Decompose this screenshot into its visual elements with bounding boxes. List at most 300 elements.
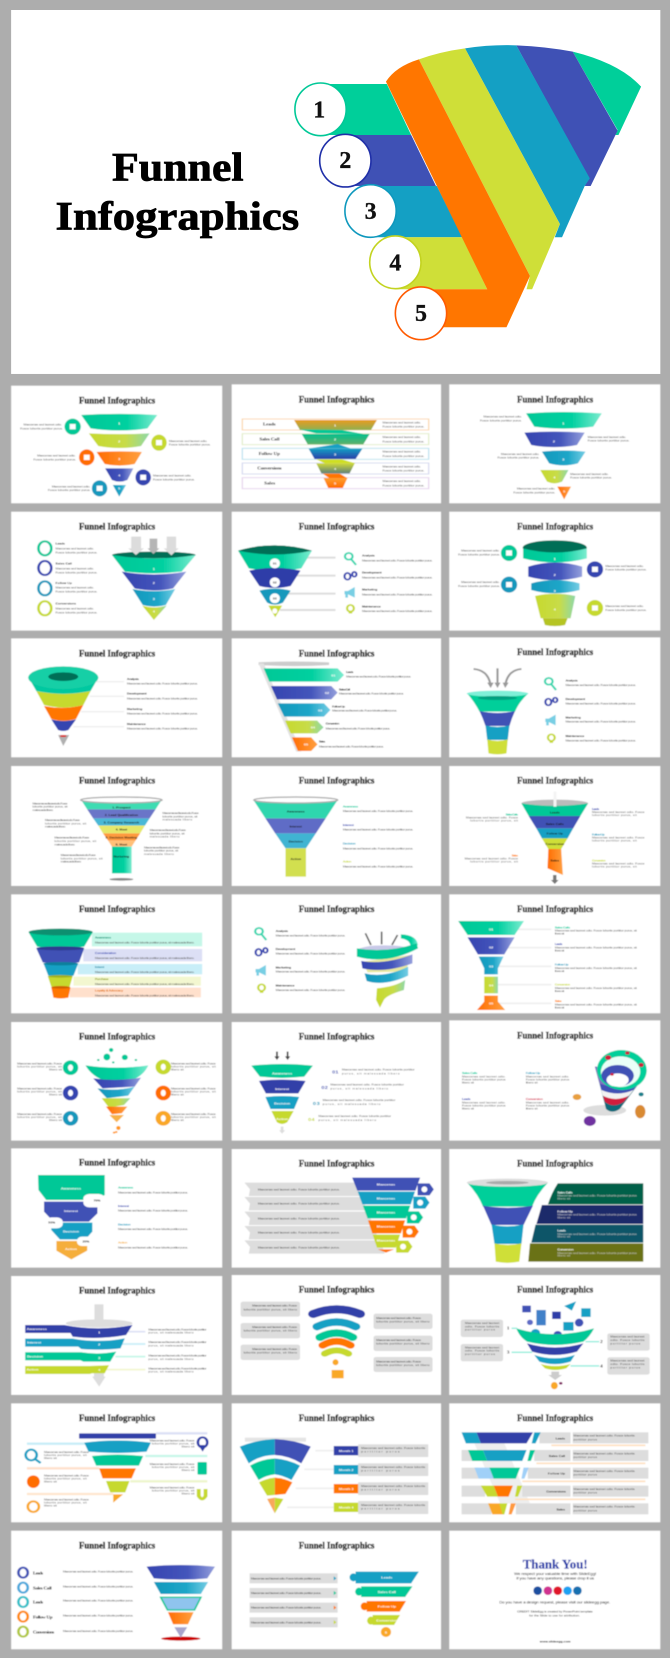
descriptions: Maecenas sed laoreet odio. Fusce — [150, 1486, 195, 1490]
row labels: Maecenas sed laoreet odio. Fusce lobortis — [574, 1434, 635, 1438]
gray boxes: Maecenas sed laoreet odio. Fusce — [252, 1347, 297, 1351]
boxes: 2 — [600, 1340, 603, 1344]
descriptions: lobortis porttitor purus, sit — [45, 822, 86, 825]
descriptions: lobortis porttitor purus, sit — [17, 1090, 62, 1094]
ribbons: Maecenas sed laoreet odio. Fusce lobortis porttitor purus. — [258, 1188, 340, 1191]
descriptions: lobortis porttitor purus, sit — [17, 1115, 62, 1119]
descriptions: Maecenas sed laoreet odio. — [153, 474, 192, 478]
hero title: Funnel — [112, 145, 244, 189]
gray boxes: lobortis porttitor purus, sit libero — [376, 1363, 430, 1367]
connectors — [280, 558, 336, 610]
descriptions: Maecenas sed laoreet odio. Fusce — [54, 836, 90, 840]
tags: 05 — [304, 743, 308, 747]
list: purus, sit malesuada libero — [323, 1102, 381, 1106]
funnel: 4 — [553, 476, 555, 480]
list: Follow Up — [33, 1615, 53, 1619]
list: Maecenas sed laoreet odio. Fusce lobortis porttitor purus, sit — [555, 966, 637, 970]
title: Funnel Infographics — [517, 648, 593, 658]
list: Maecenas sed laoreet odio. Fusce lobortis porttitor purus. — [332, 709, 397, 713]
descriptions: lobortis porttitor purus, sit — [470, 819, 518, 823]
list: Maecenas sed laoreet odio. Fusce lobortis porttitor purus. — [127, 697, 198, 700]
tags: 01 — [331, 674, 336, 677]
row labels: Maecenas sed laoreet odio. — [383, 435, 421, 439]
title: Funnel Infographics — [299, 777, 374, 786]
descriptions: malesuada libero — [32, 808, 53, 812]
descriptions: Maecenas sed laoreet odio. Fusce — [44, 1450, 89, 1454]
list: Maecenas sed laoreet odio. Fusce lobortis porttitor purus. — [362, 576, 433, 579]
list: Maecenas sed laoreet odio. Fusce lobortis porttitor purus. — [565, 720, 636, 724]
descriptions: Maecenas sed laoreet odio. Fusce — [17, 1087, 62, 1091]
row labels: Sales Call — [549, 1454, 565, 1458]
descriptions: Sales Calls — [506, 813, 518, 816]
funnel — [81, 797, 162, 881]
descriptions: lobortis porttitor purus, sit — [592, 865, 637, 869]
descriptions — [465, 807, 645, 869]
descriptions — [44, 1439, 195, 1507]
funnel: Decision — [63, 1230, 79, 1233]
funnel: Decision — [289, 840, 303, 843]
descriptions: Fusce lobortis porttitor purus. — [458, 553, 500, 556]
title: Funnel Infographics — [517, 777, 593, 786]
funnel: 4 — [554, 608, 556, 612]
descriptions: Maecenas sed laoreet odio. — [501, 452, 540, 456]
panel 6: ring funnel — [449, 512, 660, 631]
descriptions: Maecenas sed laoreet odio. Fusce — [17, 1062, 62, 1065]
hero number circles: 2 — [339, 146, 351, 173]
funnel: Action — [290, 857, 301, 861]
descriptions: malesuada libero — [162, 818, 193, 822]
funnel: 3 — [118, 457, 120, 461]
descriptions: Follow Up — [526, 1071, 540, 1075]
panel 21: funnel with dark panels — [449, 1149, 660, 1268]
descriptions: Maecenas sed laoreet odio. — [461, 549, 500, 552]
descriptions: Maecenas sed laoreet odio. Fusce — [150, 828, 186, 832]
spiral — [357, 932, 418, 1008]
descriptions: lobortis porttitor purus, sit — [17, 1065, 62, 1068]
boxes: Maecenas sed laoreet — [465, 1346, 499, 1349]
title: Funnel Infographics — [517, 523, 593, 532]
descriptions: Maecenas sed laoreet odio. Fusce — [32, 802, 68, 805]
row text: Loyalty & Advocacy — [95, 989, 123, 992]
descriptions: lobortis porttitor purus, sit — [171, 1065, 216, 1068]
panel 29: tabbed funnel — [232, 1531, 441, 1649]
title: Funnel Infographics — [79, 397, 155, 406]
funnel: 03 — [489, 965, 493, 968]
descriptions: Maecenas sed laoreet odio. Fusce — [171, 1087, 216, 1091]
list: Sales Calls — [555, 926, 570, 929]
descriptions: Maecenas sed laoreet odio. Fusce — [466, 816, 518, 820]
descriptions: libero sit — [44, 1456, 57, 1460]
funnel — [352, 1178, 420, 1253]
list: Sales Call — [339, 688, 350, 691]
hero panel: Funnel Infographics — [11, 10, 660, 374]
icons — [255, 928, 268, 992]
descriptions: lobortis porttitor purus, sit — [162, 815, 198, 818]
gray boxes: lobortis porttitor purus, sit libero — [244, 1308, 297, 1311]
list — [565, 679, 636, 742]
panel 5: funnel with connectors and icons — [232, 512, 441, 631]
list: Leads — [555, 942, 563, 946]
funnel — [523, 540, 587, 626]
funnel: 5 — [118, 487, 120, 491]
funnel: 6. Meet — [116, 843, 127, 846]
funnel: Maecenas — [377, 1197, 395, 1200]
gray boxes: Maecenas sed laoreet odio. Fusce — [376, 1360, 421, 1363]
title: Funnel Infographics — [79, 905, 155, 915]
descriptions: Maecenas sed laoreet odio. Fusce — [44, 1498, 89, 1501]
arrows — [128, 537, 179, 555]
descriptions: lobortis porttitor purus, sit — [470, 860, 518, 863]
list: libero sit — [555, 949, 564, 952]
funnel: 01 — [489, 928, 493, 932]
row labels: Sales Call — [259, 437, 280, 441]
cone — [28, 666, 98, 746]
list — [118, 1186, 188, 1249]
boxes: porttitor purus — [610, 1342, 641, 1345]
list: Marketing — [362, 588, 378, 592]
boxes: 1 — [507, 1326, 510, 1330]
title: Funnel Infographics — [79, 649, 155, 659]
gray arrow — [66, 1304, 132, 1387]
descriptions: purus, sit malesuada libero — [148, 1331, 194, 1335]
descriptions: Follow Up — [592, 833, 605, 836]
descriptions: Sales Calls — [462, 1071, 478, 1075]
funnel: 2 — [118, 440, 120, 444]
descriptions: lobortis porttitor purus, sit — [152, 1489, 195, 1493]
funnel — [38, 1175, 105, 1259]
funnel — [85, 1048, 148, 1134]
descriptions: Maecenas sed laoreet odio. — [24, 423, 62, 426]
footer text: CREDIT: SlideEgg is created by PowerPoint template — [517, 1610, 593, 1613]
hero number circles — [295, 83, 447, 340]
list: Awareness — [343, 805, 358, 809]
list: Conversion — [326, 722, 339, 726]
tags: 02 — [325, 691, 329, 695]
funnel: 2 — [334, 438, 336, 442]
descriptions: Maecenas sed laoreet odio. — [37, 454, 76, 457]
list: Maecenas sed laoreet odio. Fusce lobortis porttitor purus. — [276, 952, 345, 955]
funnel: Sales Calls — [546, 822, 564, 826]
list: Maecenas sed laoreet odio. Fusce lobortis porttitor purus. — [319, 745, 384, 748]
connectors — [287, 1451, 334, 1507]
funnel: Action — [27, 1368, 38, 1372]
funnel: 1 — [334, 424, 336, 427]
title: Funnel Infographics — [299, 395, 374, 405]
title: Funnel Infographics — [79, 777, 155, 786]
list: Maecenas sed laoreet odio. Fusce lobortis porttitor purus. — [346, 675, 411, 678]
descriptions: Maecenas sed laoreet odio. — [462, 1075, 506, 1079]
list: 02 — [321, 1086, 328, 1091]
funnel: 1 — [153, 567, 155, 571]
list: Maecenas sed laoreet odio. Fusce lobortis porttitor purus. — [118, 1227, 188, 1231]
list: Maecenas sed laoreet odio. Fusce lobortis porttitor purus. — [118, 1191, 188, 1194]
gray boxes: lobortis porttitor purus, sit libero — [376, 1320, 430, 1324]
list: Maecenas sed laoreet odio. Fusce lobortis porttitor purus. — [343, 828, 413, 831]
funnel — [147, 1565, 215, 1641]
title: Funnel Infographics — [299, 905, 374, 915]
row labels: Leads — [263, 422, 276, 427]
list: Maecenas sed laoreet odio. — [56, 567, 94, 570]
descriptions: lobortis porttitor purus, sit — [152, 1442, 195, 1445]
descriptions: lobortis porttitor purus, sit — [152, 1465, 195, 1469]
list: Decision — [118, 1223, 131, 1226]
list: Interest — [343, 823, 354, 827]
panel 2: twisted funnel with rows — [232, 384, 441, 503]
title: Funnel Infographics — [79, 1287, 155, 1296]
descriptions — [458, 549, 647, 612]
funnel: Conversion — [545, 842, 564, 846]
row labels: porttitor purus — [574, 1455, 598, 1459]
descriptions: lobortis porttitor purus, sit — [150, 832, 185, 835]
dark panels: Maecenas sed laoreet odio. Fusce lobortis porttitor purus — [557, 1213, 637, 1217]
hex icons — [396, 1183, 434, 1253]
tags: 03 — [318, 709, 322, 712]
funnel — [238, 545, 312, 617]
funnel segments — [462, 1432, 541, 1514]
funnel: Interest — [27, 1341, 42, 1345]
hero title: Infographics — [56, 194, 299, 238]
list: Analysis — [127, 677, 139, 681]
hero funnel chart — [321, 45, 641, 327]
title: Funnel Infographics — [79, 1414, 155, 1424]
list: Sales Call — [56, 562, 72, 566]
list: Maecenas sed laoreet odio. Fusce lobortis porttitor purus. — [276, 970, 345, 974]
connectors — [498, 929, 551, 1003]
boxes: odio. Fusce lobortis — [610, 1338, 645, 1342]
list — [18, 1568, 134, 1637]
message: If you have any questions, please drop it us — [516, 1577, 594, 1581]
descriptions: Maecenas sed laoreet odio. Fusce — [61, 853, 96, 857]
row labels: Maecenas sed laoreet odio. Fusce lobortis — [574, 1452, 635, 1455]
boxes: 4 — [600, 1364, 603, 1368]
panel 13: stacked funnel with tinted rows — [11, 894, 222, 1013]
tags — [259, 661, 344, 752]
funnel: 4 — [334, 467, 336, 471]
list — [319, 670, 411, 748]
dark panels: Sales Calls — [557, 1191, 573, 1194]
funnel: Interest — [290, 825, 302, 828]
descriptions: libero sit — [526, 1107, 538, 1110]
list: Follow Up — [555, 963, 569, 967]
funnel: 3 — [554, 589, 556, 593]
connectors — [74, 682, 124, 727]
title: Funnel Infographics — [299, 1286, 374, 1295]
dark panels: libero sit — [557, 1235, 570, 1239]
boxes: porttitor purus — [465, 1352, 495, 1356]
ribbons: Maecenas sed laoreet odio. Fusce lobortis porttitor purus. — [258, 1231, 340, 1235]
list: libero sit — [555, 969, 564, 973]
funnel: Decision — [27, 1355, 43, 1358]
thumbnail grid — [11, 384, 660, 1649]
list: Marketing — [127, 707, 142, 711]
descriptions: malesuada libero — [54, 843, 75, 846]
gray boxes: lobortis porttitor purus, sit libero — [244, 1329, 297, 1333]
row labels: Fusce lobortis porttitor purus. — [383, 469, 425, 473]
descriptions: Conversion — [592, 859, 606, 862]
title: Funnel Infographics — [299, 523, 374, 532]
list: Development — [565, 697, 585, 701]
row labels: Conversions — [257, 466, 282, 471]
descriptions: Maecenas sed laoreet odio. Fusce lobortis porttitor — [148, 1354, 206, 1358]
list: Maecenas sed laoreet odio. Fusce lobortis porttitor purus. — [63, 1585, 134, 1588]
list: Maecenas sed laoreet odio. Fusce lobortis porttitor — [323, 1098, 395, 1102]
descriptions: Fusce lobortis porttitor purus. — [588, 439, 630, 443]
descriptions: lobortis porttitor purus, sit — [32, 805, 68, 809]
list: Maecenas sed laoreet odio. Fusce lobortis porttitor purus. — [362, 559, 433, 562]
funnel — [350, 1572, 419, 1637]
month rows: Month 1 — [339, 1449, 354, 1453]
descriptions: Fusce lobortis porttitor purus. — [169, 443, 211, 447]
list: Maintenance — [565, 734, 585, 738]
descriptions: Leads — [592, 807, 600, 811]
descriptions: Maecenas sed laoreet odio. — [483, 415, 522, 419]
list: Maintenance — [127, 722, 146, 726]
funnel: 2 — [554, 573, 556, 577]
list: Awareness — [118, 1186, 134, 1190]
panel 27: segmented funnel rows — [449, 1403, 660, 1522]
funnel — [25, 1325, 132, 1374]
funnel: 05 — [489, 1002, 493, 1005]
boxes: Maecenas sed laoreet — [465, 1321, 499, 1325]
descriptions: Maecenas sed laoreet odio. — [461, 580, 500, 584]
descriptions: libero sit — [49, 1093, 62, 1097]
list: Sales Call — [33, 1586, 53, 1590]
row labels: porttitor purus — [574, 1491, 598, 1495]
list: 04 — [308, 1117, 315, 1123]
list: Maecenas sed laoreet odio. — [56, 547, 94, 550]
row labels: Fusce lobortis porttitor purus. — [383, 454, 425, 458]
funnel — [81, 414, 157, 497]
gray rows: Maecenas sed laoreet odio. Fusce lobortis porttitor purus. — [251, 1591, 322, 1595]
funnel: 5. Decision Meeting — [106, 836, 137, 839]
funnel — [467, 1179, 548, 1263]
list: Maecenas sed laoreet odio. Fusce lobortis porttitor purus. — [565, 683, 636, 687]
list — [555, 926, 637, 1009]
funnel — [521, 792, 588, 884]
descriptions: Maecenas sed laoreet odio. Fusce lobortis porttitor — [148, 1328, 206, 1331]
descriptions: Maecenas sed laoreet odio. — [169, 439, 207, 443]
descriptions: lobortis porttitor purus, sit — [592, 839, 637, 842]
title: Funnel Infographics — [517, 395, 593, 405]
row labels: Maecenas sed laoreet odio. — [383, 465, 421, 468]
descriptions: libero sit — [44, 1504, 57, 1507]
descriptions: Maecenas sed laoreet odio. Fusce lobortis porttitor — [148, 1340, 206, 1344]
list: Maecenas sed laoreet odio. Fusce lobortis porttitor purus. — [276, 988, 345, 992]
boxes — [461, 1320, 650, 1375]
list: Follow Up — [332, 705, 345, 708]
list — [362, 554, 433, 613]
funnel: Awareness — [272, 1072, 292, 1075]
list: Maecenas sed laoreet odio. Fusce lobortis porttitor — [342, 1068, 415, 1071]
list: Maecenas sed laoreet odio. Fusce lobortis porttitor purus. — [118, 1246, 188, 1249]
panel 9: kitchen funnel with curved arrows — [449, 637, 660, 757]
month rows: porttitor purus — [361, 1488, 400, 1492]
row text: Maecenas sed laoreet odio. Fusce lobortis porttitor purus, sit malesuada libero. — [95, 994, 195, 998]
funnel: Awareness — [27, 1327, 47, 1331]
gray rows: Maecenas sed laoreet odio. Fusce lobortis porttitor purus. — [251, 1577, 322, 1580]
funnel: 2 — [98, 1343, 100, 1347]
row labels: Maecenas sed laoreet odio. — [383, 421, 421, 424]
funnel — [251, 1064, 313, 1124]
row text: Consideration — [95, 951, 116, 955]
list: Maecenas sed laoreet odio. Fusce lobortis porttitor purus, sit — [555, 929, 637, 933]
month rows: Maecenas sed laoreet odio. Fusce lobortis — [361, 1503, 426, 1507]
panel 18: isometric funnel illustration — [449, 1020, 660, 1141]
row text: Intent — [95, 965, 104, 969]
row labels: Sales — [264, 481, 275, 485]
list: Marketing — [565, 716, 581, 719]
funnel: 50% — [48, 1221, 55, 1225]
descriptions: Fusce lobortis porttitor purus — [526, 1078, 570, 1081]
panel 12: funnel with orange stem — [449, 766, 660, 886]
row text — [95, 936, 195, 998]
fan funnel — [240, 1438, 311, 1513]
row labels: Follow Up — [259, 452, 280, 456]
descriptions: Fusce lobortis porttitor purus. — [20, 427, 63, 430]
month rows: porttitor purus — [361, 1450, 400, 1454]
funnel — [516, 1328, 594, 1389]
title: Funnel Infographics — [299, 1159, 374, 1169]
descriptions: malesuada libero — [144, 852, 174, 856]
row labels: Fusce lobortis porttitor purus. — [383, 484, 425, 487]
panel 28: glossy funnel with list — [11, 1531, 222, 1649]
list: Maecenas sed laoreet odio. Fusce lobortis porttitor purus. — [63, 1614, 134, 1618]
list: Maecenas sed laoreet odio. Fusce lobortis porttitor purus. — [63, 1570, 134, 1574]
list: Maecenas sed laoreet odio. Fusce lobortis porttitor purus. — [343, 809, 413, 813]
descriptions: Fusce lobortis porttitor purus — [462, 1078, 506, 1081]
panel 10: sales pipeline funnel — [11, 766, 222, 886]
descriptions: lobortis porttitor purus, sit — [171, 1090, 216, 1094]
footer text: Do you have a design request, please visit our slideegg page. — [499, 1601, 610, 1605]
title: Funnel Infographics — [299, 1414, 374, 1424]
descriptions: Maecenas sed laoreet odio. Fusce — [162, 811, 199, 815]
panel 23: arc funnel — [232, 1275, 441, 1395]
descriptions: lobortis porttitor purus, sit — [171, 1115, 216, 1119]
gray rows — [462, 1432, 648, 1514]
descriptions: Fusce lobortis porttitor purus. — [513, 491, 555, 494]
icons — [65, 419, 167, 496]
funnel: Action — [276, 1117, 288, 1121]
descriptions: lobortis porttitor purus, sit — [44, 1501, 87, 1504]
list: Maecenas sed laoreet odio. Fusce lobortis porttitor purus, sit — [555, 1003, 637, 1006]
month rows: Month 4 — [339, 1506, 354, 1510]
funnel: 04 — [489, 984, 493, 988]
descriptions: Fusce lobortis porttitor purus. — [48, 488, 91, 492]
funnel: 3 — [98, 1356, 100, 1360]
funnel: 4 — [98, 1368, 100, 1372]
flying icons — [522, 1301, 591, 1339]
funnel: 01 — [273, 562, 277, 565]
descriptions: Fusce lobortis porttitor purus. — [153, 478, 195, 481]
list: Fusce lobortis porttitor purus. — [56, 551, 98, 554]
list: Maecenas sed laoreet odio. Fusce lobortis porttitor purus. — [343, 847, 413, 850]
row labels: Maecenas sed laoreet odio. Fusce lobortis — [574, 1469, 635, 1473]
descriptions: Maecenas sed laoreet odio. Fusce — [144, 846, 180, 849]
descriptions: lobortis porttitor purus, sit — [54, 839, 96, 843]
dark panels: Conversion — [557, 1248, 574, 1252]
list: Maecenas sed laoreet odio. Fusce lobortis porttitor purus. — [127, 712, 198, 716]
descriptions: Maecenas sed laoreet odio. — [517, 487, 555, 491]
descriptions: libero sit — [182, 1492, 195, 1496]
panel 3: stacked funnel — [449, 384, 660, 503]
row labels: Maecenas sed laoreet odio. Fusce lobortis — [574, 1505, 635, 1509]
boxes: porttitor purus — [465, 1328, 495, 1332]
row text: Awareness — [95, 936, 111, 940]
descriptions: Maecenas sed laoreet odio. — [605, 564, 644, 568]
descriptions: libero sit — [182, 1445, 195, 1448]
descriptions: Leads — [462, 1097, 471, 1101]
row labels: Fusce lobortis porttitor purus. — [383, 440, 425, 443]
